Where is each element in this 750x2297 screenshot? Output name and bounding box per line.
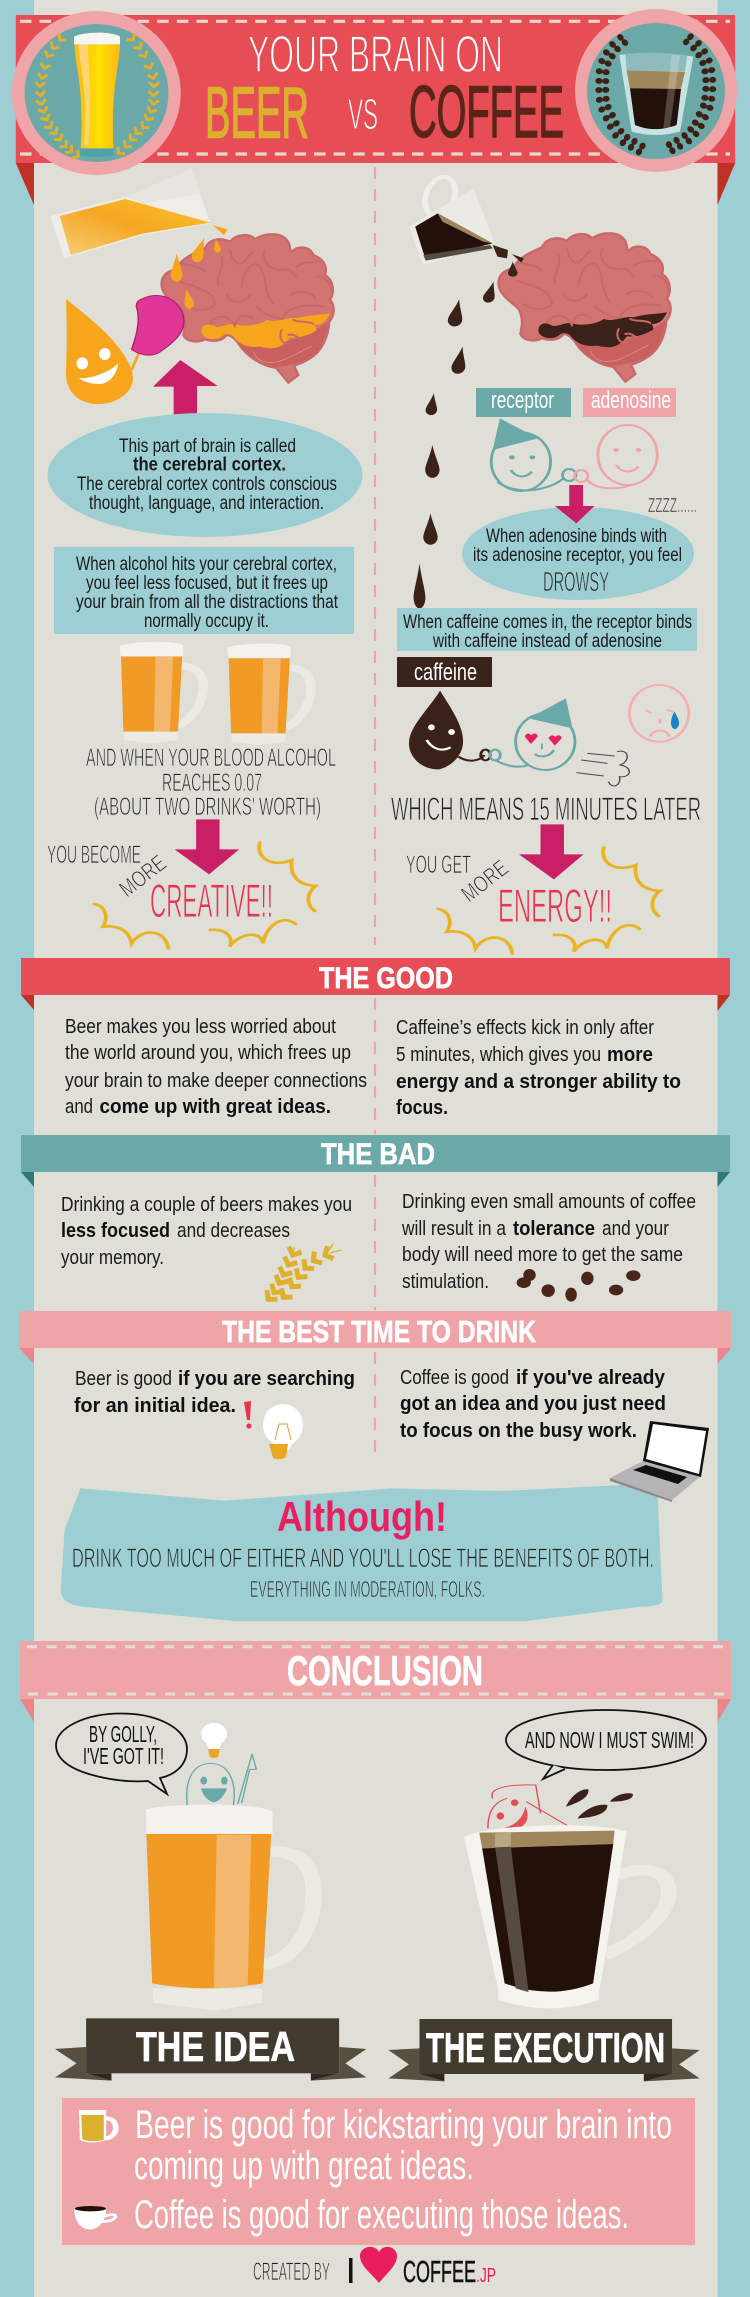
icon: beer drops [171,225,227,310]
heading: the best time to drink [19,1311,731,1364]
text: the good coffee [396,1017,681,1119]
callout: although blob: Although! [277,1493,447,1540]
heading: the good [21,958,730,1011]
heading: the bad: THE BAD [321,1138,435,1171]
header ribbon: CREATIVE!! [150,874,273,927]
icon: large coffee mug [464,1825,669,2008]
speech bubble: by golly: BY GOLLY, [89,1721,157,1747]
icon: coffee drops [414,245,524,608]
icon: heart [360,2247,397,2283]
icon: small light bulb [201,1723,227,1758]
callout: cerebral cortex ellipse: the cerebral cortex. [133,454,286,476]
speech bubble: by golly: I'VE GOT IT! [83,1743,164,1769]
icon: two beer mugs [120,642,311,745]
text: best time beer: for an initial idea. [74,1395,236,1417]
callout: cerebral cortex ellipse: The cerebral cortex controls conscious [77,474,337,495]
text: the bad coffee: stimulation. [402,1271,489,1293]
title text: BEER [205,74,309,154]
icon: exclamation and light bulb [244,1401,303,1459]
title text: YOUR BRAIN ON [248,26,503,84]
icon: coffee beans [517,1269,640,1302]
callout: caffeine box: with caffeine instead of adenosine [432,631,662,652]
icon: magenta glove [132,295,184,355]
callout: alcohol box: you feel less focused, but it frees up [86,573,328,594]
text: you get more energy: ENERGY!! [498,879,612,932]
label: caffeine: caffeine [414,659,477,686]
text: the good beer [65,1016,367,1118]
title text: COFFEE [409,72,564,153]
panel: summary [62,2098,695,2245]
callout: cerebral cortex ellipse: This part of brain is called [119,436,296,457]
decoration: yellow bursts right [438,848,660,953]
text: blood alcohol: AND WHEN YOUR BLOOD ALCOHOL [86,744,336,772]
text: best time coffee: to focus on the busy work. [400,1420,637,1442]
arrow: down to drowsy [555,485,595,523]
callout: alcohol box [54,547,354,634]
text: best time coffee [400,1367,666,1442]
text: the bad coffee: will result in a [401,1218,507,1240]
arrow: down to energy [519,824,584,879]
text: the good coffee: energy and a stronger ability to [396,1071,681,1093]
icon: beer character [187,1754,256,1807]
text: the bad coffee: body will need more to get the same [402,1244,683,1266]
title text: VS [348,90,378,139]
callout: although blob: EVERYTHING IN MODERATION, FOLKS. [250,1576,485,1602]
text: the good beer: come up with great ideas. [100,1096,331,1118]
text: best time beer [74,1368,355,1417]
text: you become more creative: MORE [114,849,171,902]
icon: wheat [268,1244,341,1299]
text: you get more energy: MORE [456,854,513,907]
text: you become more creative: YOU BECOME [47,841,141,869]
text: best time coffee: Coffee is good [400,1367,509,1389]
icon: mini beer mug [79,2110,116,2142]
text: the good beer: your brain to make deeper connections [65,1070,367,1092]
credit: .JP [476,2265,496,2287]
label: adenosine [583,387,676,417]
text: the bad coffee: Drinking even small amounts of coffee [402,1191,696,1213]
title text [205,26,564,154]
text: the good beer: the world around you, which frees up [65,1042,351,1064]
badge: coffee [575,9,737,172]
text: the good coffee: Caffeine’s effects kick in only after [396,1017,654,1039]
text: best time coffee: if you've already [516,1367,666,1389]
text: the good beer: and [65,1096,93,1118]
text: the bad coffee: tolerance [513,1218,595,1240]
callout: drowsy ellipse: DROWSY [543,566,609,597]
icon: brain with coffee [499,233,671,382]
ribbon: the idea [55,2018,366,2081]
label: adenosine: adenosine [591,387,671,414]
text: the bad beer: Drinking a couple of beers makes you [61,1194,352,1216]
icon: mini coffee cup [74,2206,115,2229]
credit: CREATED BY [253,2258,330,2286]
callout: alcohol box: When alcohol hits your cerebral cortex, [76,554,337,575]
arrow: up to cerebral cortex [153,360,218,415]
credit [253,2247,496,2289]
callout: drowsy ellipse: When adenosine binds with [486,526,667,547]
text: the bad beer: less focused [61,1220,170,1242]
text: you get more energy: YOU GET [406,851,471,879]
arrow: down to creative [175,819,239,874]
text: best time beer: Beer is good [75,1368,172,1390]
ribbon: the execution [388,2019,700,2081]
heading: conclusion: CONCLUSION [287,1647,483,1694]
text: the bad beer: your memory. [61,1247,164,1269]
icon: beer drop character [66,295,184,404]
heading: the best time to drink: THE BEST TIME TO DRINK [222,1314,536,1349]
text: sleeping zzzz: ZZZZ...... [648,495,697,517]
text: the bad coffee: and your [602,1218,669,1240]
text: the bad coffee [401,1191,696,1293]
text: you get more energy [406,851,612,932]
callout: cerebral cortex ellipse: thought, language, and interaction. [89,493,324,514]
speech bubble: and now i must swim [506,1710,706,1779]
callout: cerebral cortex ellipse [48,413,362,537]
callout: although blob [61,1485,662,1621]
icon: pouring coffee cup [409,175,495,265]
callout: drowsy ellipse [462,507,694,600]
heading: the good: THE GOOD [319,962,453,995]
text: the good beer: Beer makes you less worried about [65,1016,336,1038]
text: you become more creative [47,841,273,927]
icon: caffeine binding receptor [409,685,689,786]
panel: summary: coming up with great ideas. [134,2144,474,2188]
text: blood alcohol: REACHES 0.07 [162,769,262,797]
speech bubble: by golly [56,1714,187,1794]
badge: beer [12,11,181,175]
center dashed divider [374,167,376,1462]
decoration: yellow bursts left [94,843,316,948]
text: the good coffee: focus. [396,1097,448,1119]
text: blood alcohol: (ABOUT TWO DRINKS' WORTH) [94,793,321,821]
text: blood alcohol [86,744,336,821]
callout: alcohol box: your brain from all the distractions that [76,592,339,613]
callout: caffeine box [397,608,697,652]
icon: laptop [610,1421,709,1502]
text: the good coffee: more [607,1044,653,1066]
text: the bad beer [61,1194,352,1269]
credit: COFFEE [403,2254,476,2289]
ribbon folds [16,15,735,205]
text: the bad beer: and decreases [177,1220,290,1242]
icon: coffee character [488,1785,633,1828]
callout: drowsy ellipse: its adenosine receptor, you feel [473,545,682,566]
label: receptor: receptor [491,387,554,414]
icon: pouring beer glass [50,169,210,258]
heading: the bad [21,1135,730,1187]
callout: alcohol box: normally occupy it. [144,611,269,632]
icon: brain with beer [162,234,334,383]
ribbon: the idea: THE IDEA [136,2023,295,2070]
icon: receptor and adenosine characters bound [491,418,657,491]
text: best time beer: if you are searching [178,1368,355,1390]
heading: conclusion [20,1641,731,1722]
icon: large beer mug [146,1805,314,2011]
text: best time coffee: got an idea and you just need [400,1393,666,1415]
text: the good coffee: 5 minutes, which gives you [396,1044,601,1066]
